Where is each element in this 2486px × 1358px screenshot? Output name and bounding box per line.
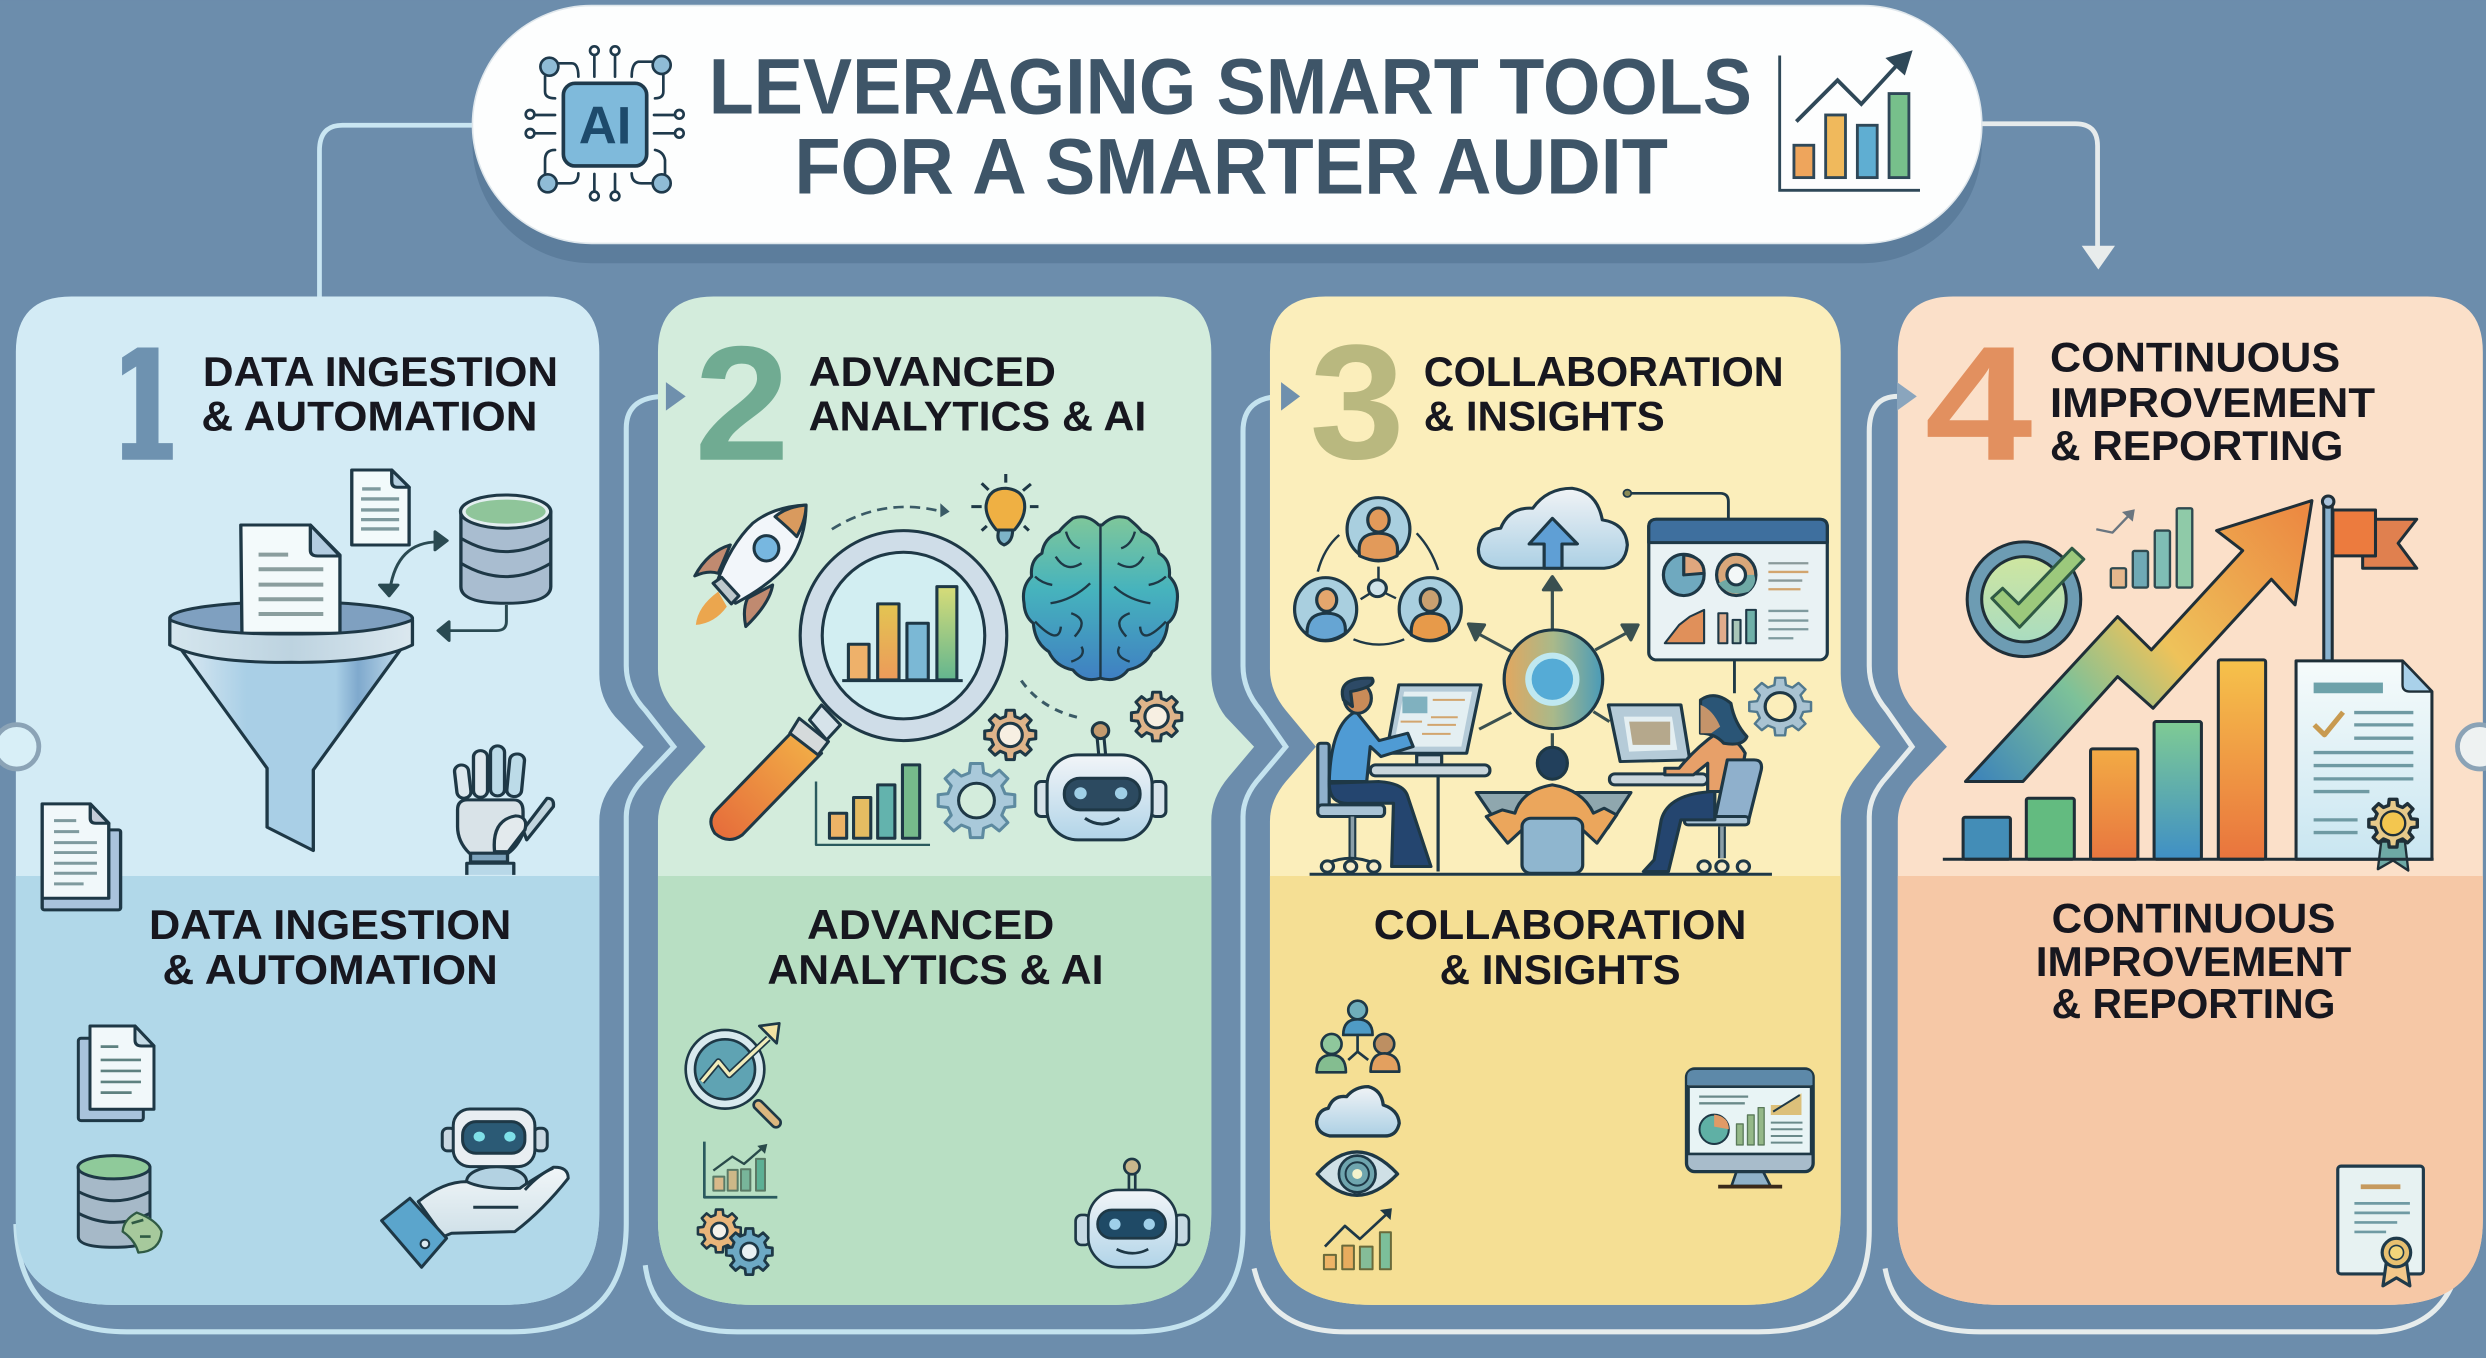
heading — [201, 348, 558, 440]
connector line around panel 1 — [16, 396, 674, 1332]
icon: gear — [1749, 678, 1811, 735]
lower label: & AUTOMATION — [163, 946, 498, 993]
illustration: team, cloud, hub, dashboard — [1295, 488, 1827, 874]
title text: LEVERAGING SMART TOOLS — [709, 41, 1752, 130]
icon: stacked document — [42, 804, 121, 910]
panel 4: continuous improvement and reporting — [1897, 297, 2486, 1305]
icon: brain — [1023, 517, 1177, 680]
dashed arrow — [832, 503, 950, 529]
icon: database — [461, 495, 551, 603]
icon: bar chart — [1963, 660, 2266, 859]
connector line around panel 4 — [1885, 1243, 2462, 1332]
lower label: DATA INGESTION — [149, 901, 511, 948]
heading: DATA INGESTION — [203, 348, 558, 395]
lower icons — [686, 1023, 1189, 1275]
icon: trend chart — [1324, 1208, 1392, 1269]
icon: magnifier with bar chart — [711, 531, 1007, 839]
icon: robot — [1036, 723, 1166, 840]
icon: cloud upload — [1478, 488, 1627, 568]
lower label: & REPORTING — [2052, 980, 2335, 1027]
lower icons — [1317, 1001, 1813, 1269]
icon: dashboard window — [1623, 490, 1827, 693]
panel 3: collaboration and insights — [1270, 297, 1880, 1305]
arrowhead into panel 2 — [666, 382, 686, 411]
ring right — [2457, 725, 2486, 769]
figure: woman at laptop — [1608, 696, 1762, 872]
icon: blue gear — [938, 764, 1015, 838]
connector line around panel 3 — [1254, 396, 1912, 1332]
lower label — [767, 901, 1103, 993]
icon: flag — [2322, 496, 2417, 662]
lower icons — [78, 1026, 568, 1267]
heading — [809, 348, 1146, 440]
icon: robot in hand — [382, 1109, 568, 1267]
icon: check badge — [1967, 542, 2084, 657]
illustration: funnel, documents, database, robot hand — [42, 470, 554, 910]
icon: two gears — [698, 1210, 772, 1275]
icon: robot — [1076, 1159, 1189, 1267]
heading — [1424, 348, 1784, 440]
lower label: & INSIGHTS — [1440, 946, 1681, 993]
icon: small document — [352, 470, 409, 545]
icon: eye — [1317, 1152, 1398, 1195]
arrows between document, database and funnel — [380, 532, 506, 641]
heading: CONTINUOUS — [2050, 334, 2340, 381]
icon: rising arrow — [1965, 501, 2312, 782]
icon: central hub — [1504, 630, 1603, 729]
arrowhead into panel 4 — [1897, 382, 1917, 411]
heading: ANALYTICS & AI — [809, 393, 1146, 440]
icon: seal with ribbon — [2369, 799, 2417, 871]
connector: title to panel 1 — [319, 125, 472, 298]
icon: small rising bars — [2096, 508, 2192, 588]
heading: IMPROVEMENT — [2050, 379, 2375, 426]
icon: report document — [2296, 661, 2432, 871]
illustration: rocket, magnifier, brain, robot — [695, 474, 1182, 845]
icon: AI chip: AI — [579, 96, 631, 155]
arrows from hub — [1468, 577, 1638, 747]
icon: growth chart — [1780, 52, 1920, 190]
icon: funnel — [170, 525, 412, 851]
number 3: 3 — [1310, 310, 1405, 493]
heading: & AUTOMATION — [201, 393, 537, 440]
lower label — [149, 901, 511, 993]
lower label: CONTINUOUS — [2052, 894, 2335, 941]
icon: database sync — [78, 1156, 162, 1253]
number 2: 2 — [694, 312, 790, 495]
lower label: ANALYTICS & AI — [767, 946, 1103, 993]
icon: light bulb — [971, 474, 1038, 545]
heading: COLLABORATION — [1424, 348, 1784, 395]
lower label: IMPROVEMENT — [2036, 938, 2352, 985]
heading: ADVANCED — [809, 348, 1056, 395]
number 1: 1 — [98, 312, 189, 495]
icon: small bar chart — [816, 765, 930, 845]
lower label: COLLABORATION — [1374, 901, 1746, 948]
panel 2: advanced analytics and AI — [658, 297, 1254, 1305]
icon: team circles — [1295, 498, 1461, 645]
icon: AI chip — [526, 46, 684, 200]
icon: monitor dashboard — [1687, 1069, 1813, 1187]
heading: & INSIGHTS — [1424, 393, 1665, 440]
number 4: 4 — [1925, 312, 2033, 495]
icon: chart with trend line — [704, 1142, 777, 1197]
lower label — [1374, 901, 1746, 993]
floor line — [1943, 855, 2434, 864]
icon: rocket — [695, 505, 806, 627]
icon: orange gears — [985, 692, 1182, 760]
arrowhead into panel 3 — [1281, 382, 1300, 411]
figure: man at monitor — [1318, 678, 1490, 872]
illustration: growth chart, check, flag, report — [1943, 496, 2434, 871]
lower label — [2036, 894, 2352, 1027]
icon: magnifier with trend — [686, 1023, 779, 1123]
title text: FOR A SMARTER AUDIT — [794, 121, 1668, 210]
connector line around panel 2 — [645, 396, 1286, 1332]
figure: centre person — [1476, 747, 1631, 873]
icon: robot hand — [454, 746, 554, 875]
lower label: ADVANCED — [807, 901, 1054, 948]
dashed link — [1021, 681, 1082, 718]
icon: document — [78, 1026, 154, 1121]
arrow: title to panel 4 — [1982, 124, 2115, 270]
heading: & REPORTING — [2050, 422, 2343, 469]
icon: cloud — [1317, 1087, 1399, 1136]
icon: people network — [1317, 1001, 1399, 1072]
floor line — [1310, 870, 1772, 879]
icon: certificate — [2338, 1166, 2423, 1286]
ring left — [0, 725, 39, 769]
panel 1: data ingestion and automation — [0, 297, 644, 1305]
title text — [709, 41, 1752, 210]
heading — [2050, 334, 2375, 469]
title banner — [472, 6, 1982, 263]
